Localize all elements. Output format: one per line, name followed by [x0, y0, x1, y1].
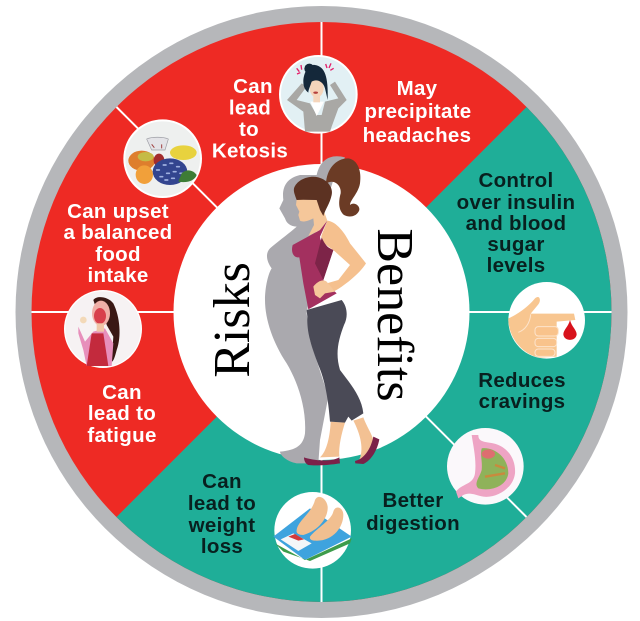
text: can lead to fatigue: Can — [102, 381, 142, 404]
panel: benefits half — [116, 107, 612, 602]
icon: feet on scale — [273, 492, 352, 569]
text: can lead to weight loss: weight — [188, 514, 255, 537]
heading: benefits: Benefits — [366, 228, 423, 402]
text: control over insulin and blood sugar levels: Control — [479, 169, 553, 192]
text: can lead to weight loss: Can — [202, 470, 242, 493]
text: can lead to ketosis: to — [239, 118, 259, 141]
hair — [294, 177, 332, 216]
arm — [321, 221, 366, 292]
text: can upset a balanced food intake: Can upset — [67, 200, 169, 223]
heading: risks: Risks — [204, 262, 261, 378]
text: control over insulin and blood sugar levels: over insulin — [457, 191, 575, 214]
text: can upset a balanced food intake: a balanced — [64, 221, 172, 244]
text: reduces cravings: cravings — [479, 390, 565, 413]
text: can upset a balanced food intake: intake — [87, 264, 149, 287]
text: can lead to weight loss: lead to — [188, 492, 256, 515]
ponytail — [326, 158, 360, 217]
text: better digestion: Better — [382, 489, 444, 512]
face and neck — [296, 199, 327, 236]
icon: headache woman — [280, 56, 357, 133]
text: can lead to ketosis: Ketosis — [212, 140, 288, 162]
text: control over insulin and blood sugar levels: sugar — [487, 233, 545, 256]
text: can upset a balanced food intake: food — [95, 243, 141, 266]
icon: stomach — [447, 428, 524, 505]
text: control over insulin and blood sugar levels: levels — [487, 254, 545, 277]
tank top — [292, 221, 337, 309]
figure: slim woman with heavier grey silhouette — [265, 156, 379, 465]
text: may precipitate headaches: May — [397, 77, 438, 100]
text: better digestion: digestion — [366, 512, 460, 535]
white centre circle — [174, 164, 470, 460]
icon: tired yawning woman — [65, 291, 141, 367]
text: may precipitate headaches: headaches — [363, 124, 471, 147]
text: reduces cravings: Reduces — [478, 369, 566, 392]
text: can lead to weight loss: loss — [201, 535, 243, 558]
back leg — [353, 417, 373, 462]
icon: finger with blood drop — [508, 282, 585, 359]
shoes — [304, 437, 379, 465]
text: may precipitate headaches: precipitate — [365, 100, 471, 123]
grey heavier silhouette — [265, 156, 345, 463]
text: can lead to fatigue: fatigue — [87, 424, 157, 447]
front leg — [320, 422, 345, 457]
icon: fruit plate — [124, 120, 201, 197]
leggings — [307, 300, 363, 423]
hand — [313, 280, 335, 298]
text: can lead to fatigue: lead to — [88, 402, 156, 425]
text: can lead to ketosis: Can — [233, 75, 273, 98]
text: control over insulin and blood sugar levels: and blood — [466, 212, 566, 235]
text: can lead to ketosis: lead — [229, 96, 271, 120]
